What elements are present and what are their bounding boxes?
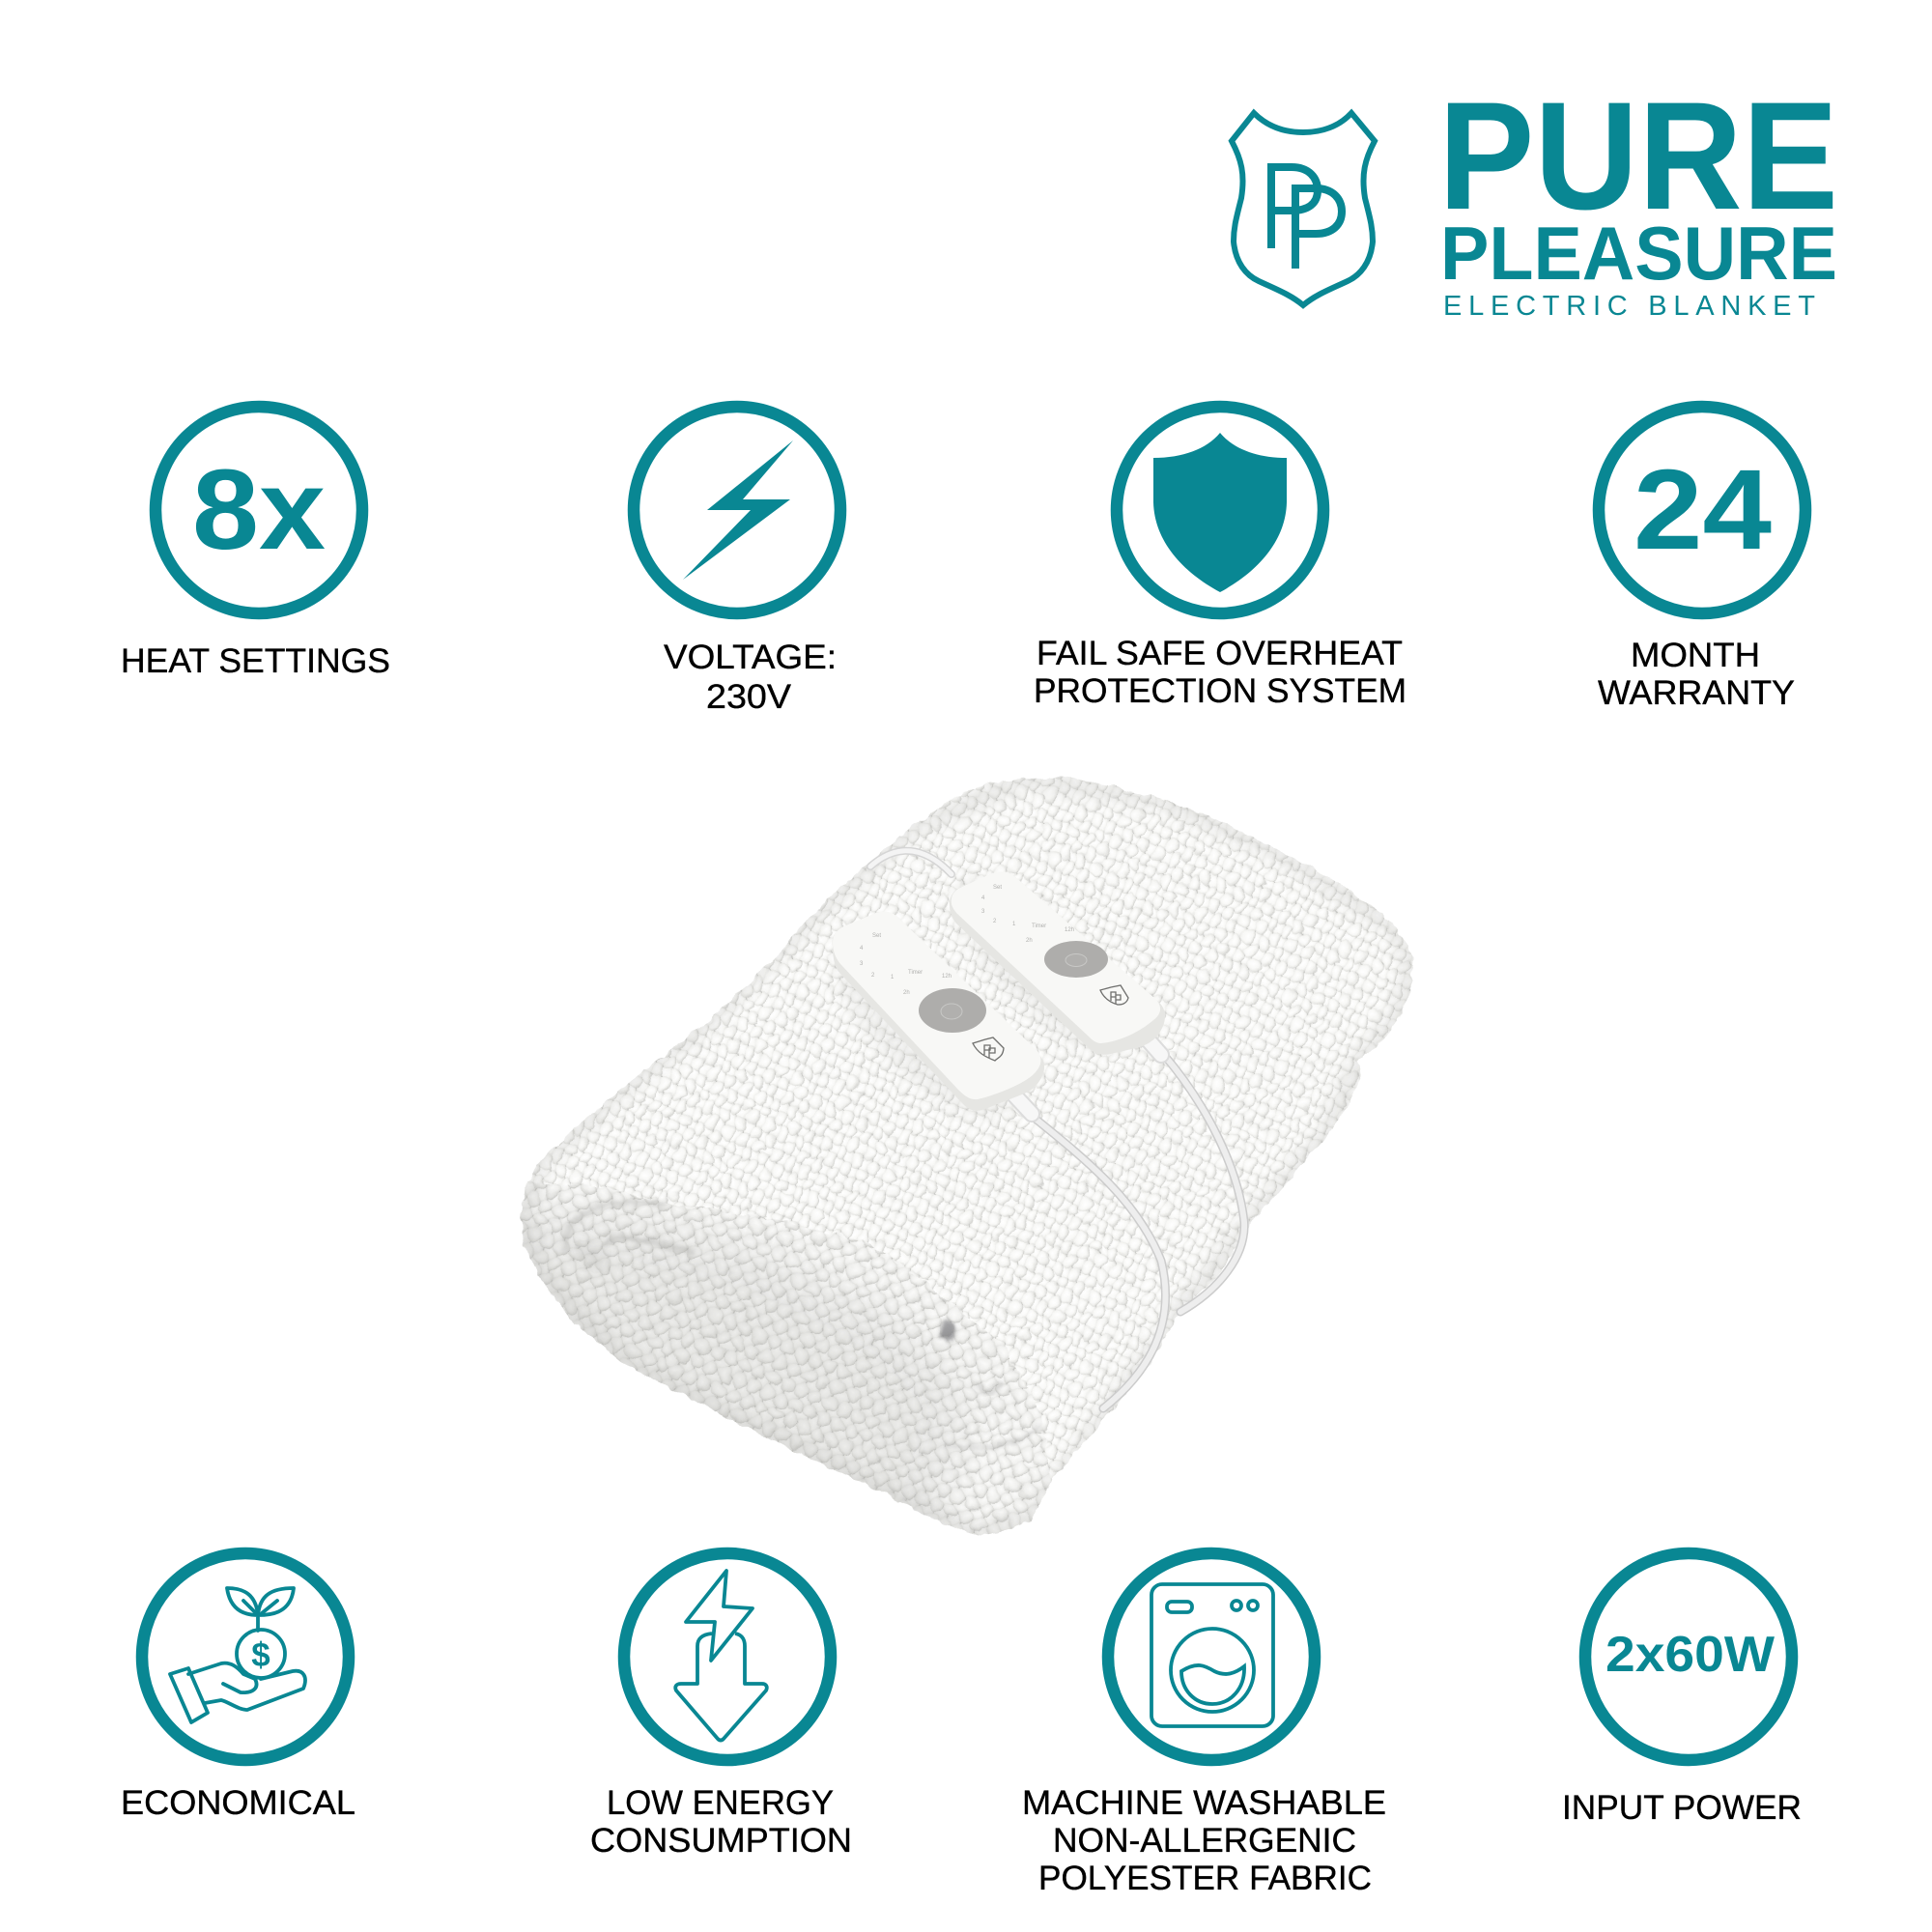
icon: washing machine (1151, 1584, 1273, 1726)
label: VOLTAGE: (664, 639, 837, 676)
remote control: left: 3 (860, 961, 864, 967)
label: POLYESTER FABRIC (1038, 1860, 1372, 1897)
ring (1599, 407, 1805, 613)
feature: low energy (590, 1553, 852, 1860)
remote control: right: 3 (981, 909, 985, 915)
icon: 2x60W: 2x60W (1605, 1627, 1776, 1683)
ring (1108, 1553, 1315, 1760)
label (590, 1784, 852, 1860)
label (1034, 635, 1406, 710)
label: NON-ALLERGENIC (1053, 1822, 1356, 1860)
soft shading (483, 779, 1413, 1565)
ring (1117, 407, 1323, 613)
icon: lightning bolt (683, 440, 793, 580)
remote control: left: Set (872, 933, 881, 939)
label: LOW ENERGY (607, 1784, 834, 1822)
icon: shield (1153, 433, 1287, 592)
label: ECONOMICAL (121, 1784, 355, 1822)
feature: warranty (1598, 407, 1805, 712)
icon: bolt and down arrow (675, 1571, 767, 1741)
icon: 8x: 8x (192, 446, 326, 574)
label: INPUT POWER (1562, 1789, 1802, 1827)
label: HEAT SETTINGS (121, 642, 390, 680)
remote control: left: Timer (908, 970, 923, 976)
feature: machine washable (1022, 1553, 1386, 1897)
remote control: left: 2 (871, 973, 875, 979)
icon: PP shield (1232, 113, 1375, 305)
ring (634, 407, 840, 613)
remote control: left: 1 (891, 975, 895, 980)
wordmark: ELECTRIC BLANKET: ELECTRIC BLANKET (1443, 291, 1815, 322)
feature: economical (121, 1553, 355, 1822)
remote control: right: 2 (993, 919, 997, 924)
blanket body (520, 777, 1414, 1536)
label: FAIL SAFE OVERHEAT (1037, 635, 1403, 672)
label: MACHINE WASHABLE (1022, 1784, 1386, 1822)
remote control: left: 4 (860, 946, 864, 952)
icon: mini shield (973, 1037, 1004, 1061)
label (664, 639, 837, 716)
power cords (870, 851, 1244, 1408)
ring (156, 407, 362, 613)
remote control: right: Timer (1032, 923, 1046, 929)
wordmark: PURE: PURE (1438, 70, 1838, 242)
feature: heat settings (121, 407, 390, 680)
label: CONSUMPTION (590, 1822, 852, 1860)
remote control: left: 2h (903, 990, 910, 996)
ring (142, 1553, 349, 1760)
ring (1585, 1553, 1792, 1760)
remote control: right: 1 (1012, 922, 1016, 927)
logo: Pure Pleasure (1232, 70, 1838, 322)
remote control: left (833, 912, 1044, 1111)
dollar sign: $ (251, 1636, 270, 1674)
feature: voltage (634, 407, 840, 716)
label: 230V (706, 678, 792, 716)
icon: mini shield (1100, 985, 1128, 1005)
remote control: right: 12h (1065, 927, 1074, 933)
feature: overheat protection (1034, 407, 1406, 710)
remote control: right: Set (993, 885, 1002, 891)
label: PROTECTION SYSTEM (1034, 672, 1406, 710)
label: WARRANTY (1598, 674, 1795, 712)
feature: input power (1562, 1553, 1802, 1827)
wordmark: PLEASURE: PLEASURE (1440, 211, 1837, 296)
front fold face (520, 1182, 1051, 1536)
ring (624, 1553, 831, 1760)
remote control: right (950, 871, 1165, 1055)
remote control: right: 2h (1026, 938, 1033, 944)
remote control: right: 4 (981, 895, 985, 901)
label (1598, 637, 1795, 712)
icon: hand holding coin and plant (170, 1588, 305, 1722)
label: MONTH (1631, 637, 1760, 674)
icon: 24: 24 (1634, 446, 1772, 574)
product photo: blanket (520, 777, 1414, 1536)
remote control: left: 12h (942, 974, 952, 980)
label (1022, 1784, 1386, 1897)
